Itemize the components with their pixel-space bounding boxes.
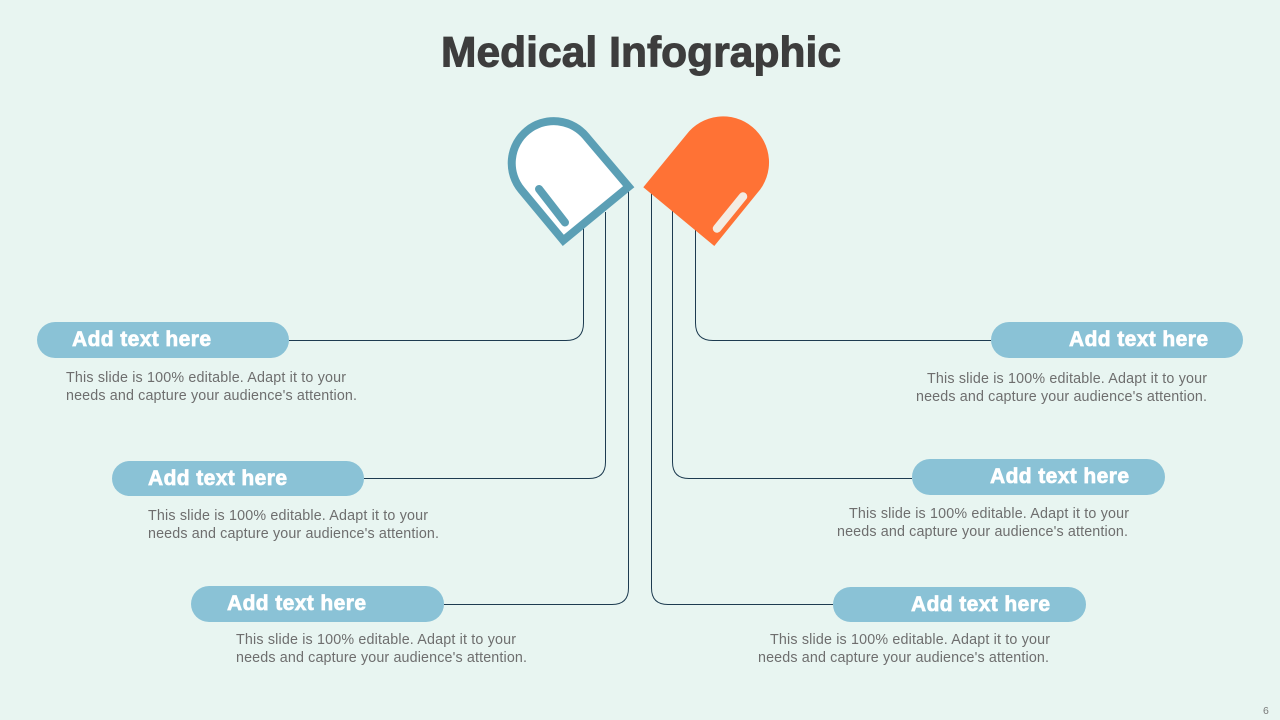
description: This slide is 100% editable. Adapt it to your: [148, 508, 428, 524]
panel: left item 2: [112, 461, 439, 542]
connector: left 3: [444, 190, 628, 604]
connector: right 3: [696, 230, 991, 340]
title: Medical Infographic: [441, 30, 841, 76]
label text: Add text here: [1069, 328, 1208, 351]
label text: Add text here: [148, 467, 287, 490]
pill label: [912, 459, 1165, 495]
description: This slide is 100% editable. Adapt it to your: [849, 506, 1129, 522]
capsule body: [643, 116, 769, 246]
connector: right 2: [672, 211, 912, 478]
description: needs and capture your audience's attention.: [148, 526, 439, 542]
description: This slide is 100% editable. Adapt it to your: [770, 632, 1050, 648]
label text: Add text here: [72, 328, 211, 351]
pill label: [112, 461, 364, 496]
label text: Add text here: [990, 465, 1129, 488]
page number: 6: [1263, 705, 1269, 717]
panel: right item 1: [916, 322, 1243, 405]
connector lines: [289, 190, 991, 604]
pill label: [191, 586, 444, 622]
connector: right 1: [652, 193, 833, 604]
capsule highlight: [539, 189, 565, 222]
pill label: [37, 322, 289, 358]
capsule highlight: [717, 196, 743, 228]
description: needs and capture your audience's attention.: [758, 650, 1049, 666]
panel: right item 2: [837, 459, 1165, 540]
label text: Add text here: [911, 593, 1050, 616]
description: This slide is 100% editable. Adapt it to your: [66, 370, 346, 386]
connector: left 1: [289, 228, 584, 340]
panel: left item 1: [37, 322, 357, 404]
description: This slide is 100% editable. Adapt it to your: [927, 371, 1207, 387]
description: This slide is 100% editable. Adapt it to your: [236, 632, 516, 648]
connector: left 2: [364, 212, 606, 478]
icon: pill left half: [512, 121, 629, 240]
label text: Add text here: [227, 592, 366, 615]
panel: right item 3: [758, 587, 1086, 666]
pill label: [991, 322, 1243, 358]
description: needs and capture your audience's attention.: [66, 388, 357, 404]
description: needs and capture your audience's attention.: [837, 524, 1128, 540]
description: needs and capture your audience's attention.: [916, 389, 1207, 405]
panel: left item 3: [191, 586, 527, 666]
capsule outline: [512, 121, 629, 240]
icon: pill right half: [643, 116, 769, 246]
pill label: [833, 587, 1086, 622]
description: needs and capture your audience's attention.: [236, 650, 527, 666]
